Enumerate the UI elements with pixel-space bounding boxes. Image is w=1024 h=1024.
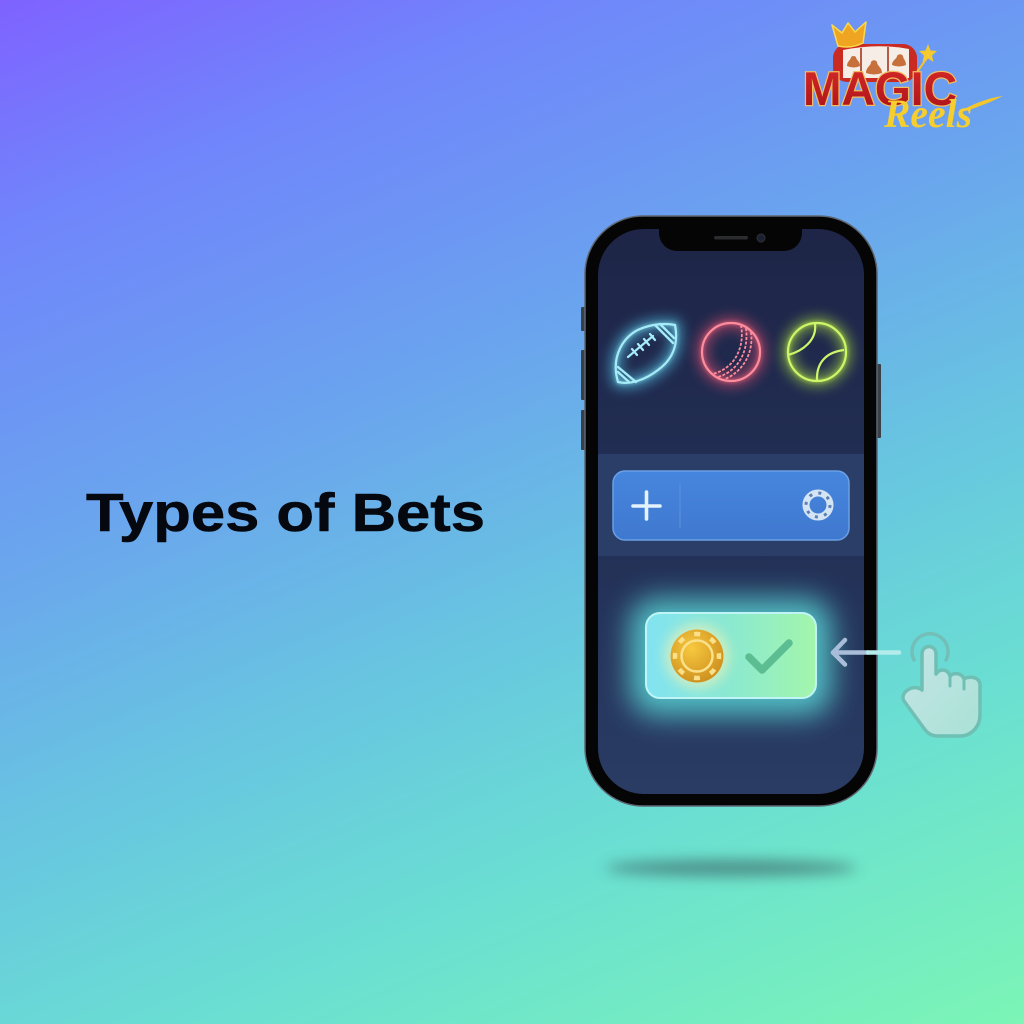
icon: neon tennis ball <box>788 323 846 381</box>
icon: neon cricket ball <box>702 323 760 381</box>
camera <box>757 234 765 242</box>
phone screen <box>598 229 864 794</box>
phone <box>581 216 899 806</box>
confirm card glow <box>630 598 832 716</box>
logo word Reels: Reels <box>883 91 972 136</box>
icon: small chip <box>806 493 830 517</box>
icon: plus <box>633 492 660 519</box>
phone body <box>585 216 877 806</box>
icon: neon football <box>616 324 676 383</box>
title: Types of Bets <box>86 483 485 543</box>
stake bar <box>613 471 849 540</box>
logo crown <box>832 22 866 47</box>
phone side buttons <box>581 307 881 450</box>
speaker <box>714 236 748 240</box>
logo swash <box>962 96 1003 112</box>
logo word MAGIC: MAGIC <box>803 62 957 115</box>
stake band <box>598 454 864 556</box>
logo wand star <box>917 44 937 72</box>
icon: gold chip <box>665 624 729 688</box>
arrow <box>833 640 899 664</box>
confirm card <box>646 613 816 698</box>
icon: tapping hand <box>903 634 980 736</box>
icon: check mark <box>749 643 789 670</box>
phone shadow <box>605 860 857 876</box>
logo slot reels <box>833 44 917 82</box>
logo: Magic Reels <box>803 22 1003 136</box>
